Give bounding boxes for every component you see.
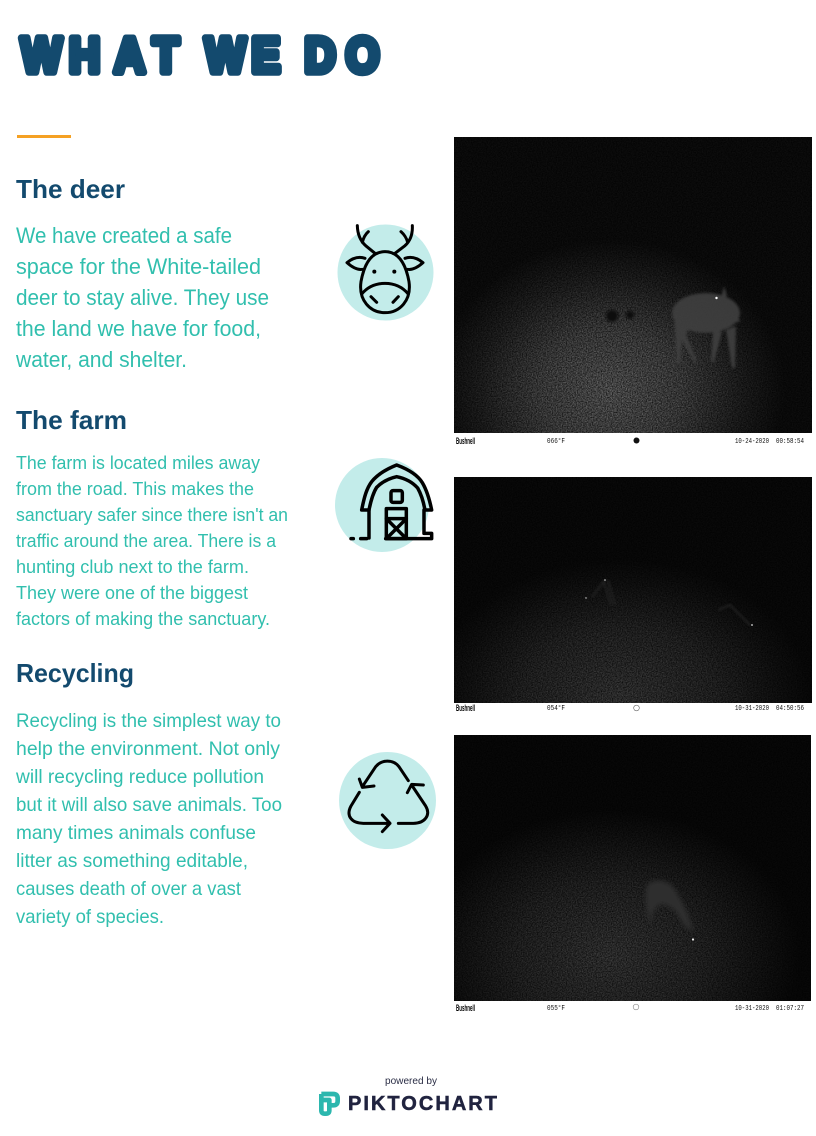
photo caption strip: Bushnell 055F: 10-31-2020: [735, 1005, 769, 1013]
heading: recycling: Recycling: [16, 658, 134, 688]
text block: recycling: but it will also save animals. Too: [16, 794, 282, 816]
text block: the farm: hunting club next to the farm.: [16, 556, 249, 577]
footer: powered by Piktochart: powered by: [385, 1075, 438, 1087]
photo caption strip: Bushnell 066F: 10-24-2020: [735, 438, 769, 446]
photo caption strip: Bushnell 054F: [456, 703, 804, 713]
text block: the farm: factors of making the sanctuary.: [16, 608, 270, 629]
text block: the farm: from the road. This makes the: [16, 478, 254, 499]
photo: deer at night, 24 October: [454, 137, 812, 433]
text block: recycling: litter as something editable,: [16, 850, 248, 872]
text block: the farm: They were one of the biggest: [16, 582, 248, 603]
photo caption strip: Bushnell 066F: Bushnell: [456, 436, 475, 446]
photo caption strip: Bushnell 054F: Bushnell: [456, 703, 475, 713]
icon: deer head: [338, 224, 434, 320]
text block: recycling: variety of species.: [16, 906, 164, 928]
text block: recycling: Recycling is the simplest way to: [16, 710, 281, 732]
title: WE: [205, 27, 280, 83]
text block: recycling: will recycling reduce pollution: [15, 766, 264, 788]
photo: deer at night, 31 October 01:07: [454, 735, 811, 1001]
section: the farm: [16, 405, 288, 629]
text block: recycling: causes death of over a vast: [16, 878, 242, 900]
deer figure: [672, 286, 740, 368]
photo: deer at night, 31 October 04:50: [454, 477, 812, 703]
text block: the deer: water, and shelter.: [15, 347, 187, 372]
photo caption strip: Bushnell 055F: 01:07:27: [776, 1005, 804, 1013]
text block: the deer: the land we have for food,: [16, 316, 261, 341]
text block: the farm: sanctuary safer since there isn't an: [16, 504, 288, 525]
photo caption strip: Bushnell 054F: 054°F: [547, 704, 565, 713]
text block: recycling: help the environment. Not only: [16, 738, 280, 760]
heading: the deer: The deer: [16, 174, 125, 204]
title: WHAT: [21, 27, 179, 83]
icon: barn: [335, 458, 432, 552]
faint deer figures: [592, 580, 750, 625]
photo caption strip: Bushnell 055F: [456, 1003, 804, 1013]
photo caption strip: Bushnell 054F: 04:50:56: [776, 705, 804, 713]
footer: powered by Piktochart: PIKTOCHART: [348, 1093, 497, 1115]
text block: the farm: traffic around the area. There is a: [16, 530, 277, 551]
text block: the deer: [15, 223, 269, 372]
icon: recycling arrows: [339, 752, 436, 849]
text block: the deer: space for the White-tailed: [16, 254, 261, 279]
footer: powered by Piktochart: [321, 1075, 497, 1115]
dark object in grass: [606, 310, 634, 322]
photo caption strip: Bushnell 054F: 10-31-2020: [735, 705, 769, 713]
text block: the farm: [16, 452, 288, 629]
title: DO: [304, 27, 379, 83]
text block: recycling: many times animals confuse: [16, 822, 256, 844]
text block: recycling: [15, 710, 282, 928]
photo caption strip: Bushnell 055F: 055°F: [547, 1004, 565, 1013]
text block: the farm: The farm is located miles away: [16, 452, 261, 473]
photo caption strip: Bushnell 055F: Bushnell: [456, 1003, 475, 1013]
section: recycling: [15, 658, 282, 928]
text block: the deer: deer to stay alive. They use: [16, 285, 269, 310]
text block: the deer: We have created a safe: [16, 223, 232, 248]
grazing deer: [646, 881, 694, 932]
accent line: [17, 135, 71, 138]
section: the deer: [15, 174, 269, 372]
icon: Piktochart logo: [321, 1094, 338, 1114]
photo caption strip: Bushnell 066F: 066°F: [547, 437, 565, 446]
photo caption strip: Bushnell 066F: [456, 436, 804, 446]
heading: the farm: The farm: [16, 405, 127, 435]
title: [21, 27, 379, 83]
photo caption strip: Bushnell 066F: 00:58:54: [776, 438, 804, 446]
